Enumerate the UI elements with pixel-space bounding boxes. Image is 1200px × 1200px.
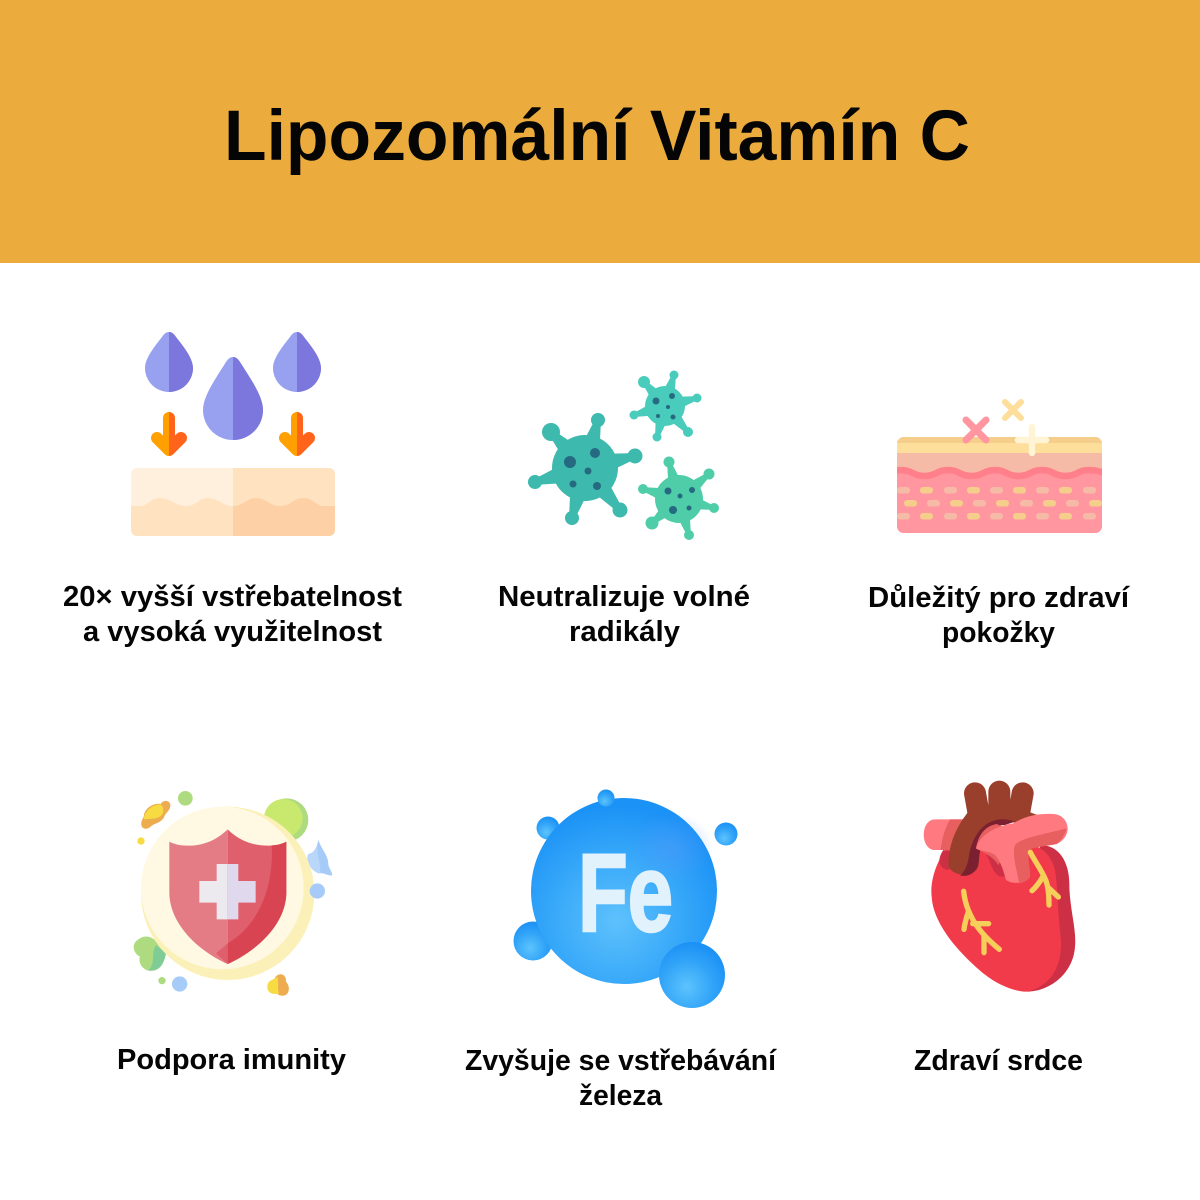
label: iron absorption: Zvyšuje se vstřebávání <box>465 1045 777 1077</box>
label: heart health: Zdraví srdce <box>914 1045 1083 1077</box>
panel: heart health <box>914 792 1083 1077</box>
title: Lipozomální Vitamín C <box>224 97 970 176</box>
label: absorption <box>63 581 402 648</box>
icon: heart <box>924 792 1075 992</box>
label: skin health: pokožky <box>942 617 1055 649</box>
icon: Fe molecule <box>514 790 738 1008</box>
label: skin health: Důležitý pro zdraví <box>868 582 1130 614</box>
label: free radicals: radikály <box>569 616 680 648</box>
icon: viruses <box>528 370 719 540</box>
label: free radicals: Neutralizuje volné <box>498 581 750 613</box>
panel: absorption <box>63 332 402 648</box>
icon: shield with cross <box>134 791 332 996</box>
header band <box>0 0 1200 263</box>
icon: skin layers <box>897 399 1102 533</box>
icon: water drops, arrows and skin <box>131 332 335 536</box>
label: free radicals <box>498 581 750 648</box>
panel: immunity <box>117 791 346 1076</box>
panel: free radicals <box>498 370 750 648</box>
panel: skin health <box>868 402 1130 649</box>
label: immunity: Podpora imunity <box>117 1044 346 1076</box>
panel: iron absorption <box>465 790 777 1112</box>
label: iron absorption <box>465 1045 777 1112</box>
label: iron absorption: železa <box>579 1080 663 1112</box>
label: skin health <box>868 582 1130 649</box>
icon: Fe molecule: Fe <box>578 832 673 955</box>
label: absorption: a vysoká využitelnost <box>83 616 382 648</box>
label: absorption: 20× vyšší vstřebatelnost <box>63 581 402 613</box>
